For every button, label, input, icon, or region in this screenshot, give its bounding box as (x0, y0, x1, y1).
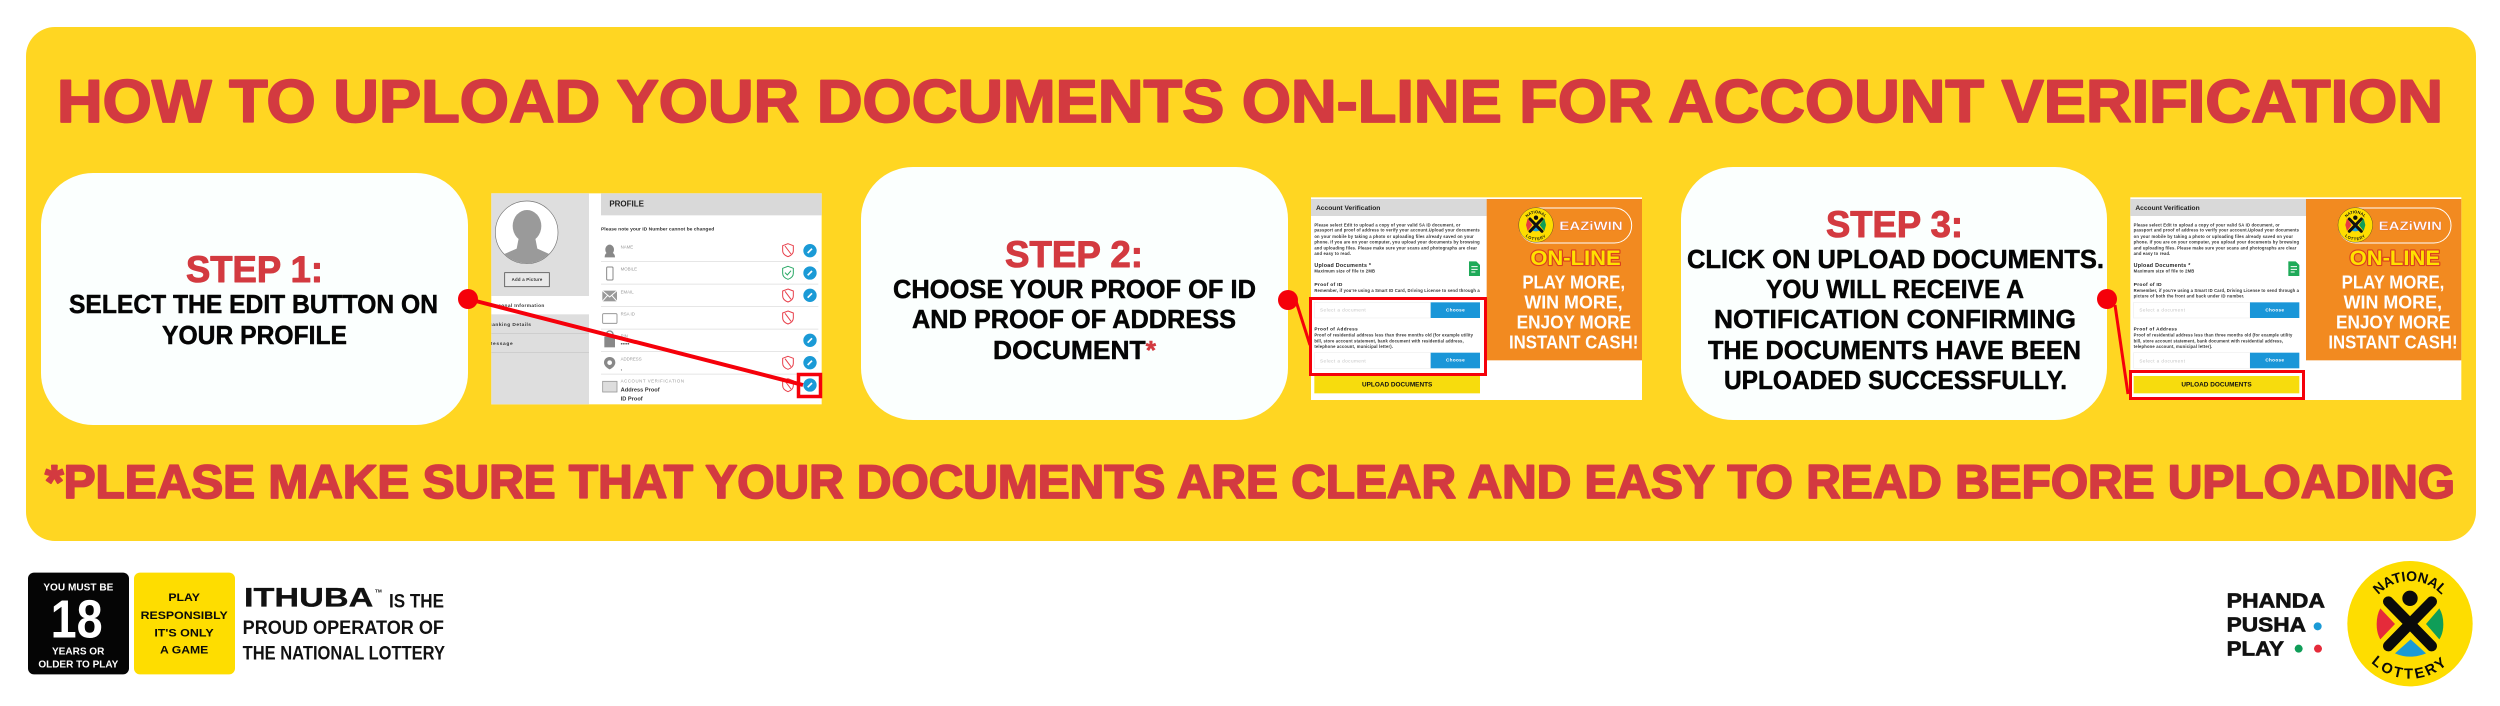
add a picture button (505, 273, 549, 287)
step 2 heading: STEP 2: (1005, 234, 1143, 275)
icon: green document (2288, 261, 2299, 276)
icon: National Lottery logo (2347, 561, 2473, 686)
document pickers: Choose (1446, 307, 1465, 312)
profile rows: RSA ID (621, 312, 635, 317)
document pickers: Choose (2265, 358, 2284, 363)
promo: Eaziwin banner (1486, 199, 1642, 360)
document pickers: telephone account, municipal letter). (2134, 344, 2212, 349)
verification instructions: Maximum size of file to 2MB (2134, 269, 2194, 274)
step 2 instruction: DOCUMENT* (993, 335, 1157, 365)
EaziWin pill: EAZiWIN (2379, 219, 2442, 233)
badge: 18 years or older: OLDER TO PLAY (38, 660, 119, 671)
slogan: Phanda Pusha Play: PUSHA (2227, 614, 2306, 637)
promo copy: WIN MORE, (1524, 291, 1623, 312)
step 3 instruction: NOTIFICATION CONFIRMING (1714, 304, 2076, 334)
verification instructions: passport and proof of address to verify your account.Upload your documents (1314, 228, 1480, 233)
verification instructions: and uploading files. Please make sure your scans and photographs are clear (2134, 245, 2297, 250)
document pickers: Proof of residential address less than three months old (for example utility (1314, 333, 1474, 338)
icon: National Lottery logo: LOTTERY (2345, 234, 2364, 240)
verification instructions: passport and proof of address to verify your account.Upload your documents (2134, 228, 2300, 233)
verification instructions: Proof of ID (2134, 282, 2162, 288)
document pickers: Select a document (2139, 358, 2186, 363)
panel: step 2 verification screenshot (1311, 197, 1642, 400)
profile rows: ••••• (621, 341, 630, 347)
badge: play responsibly: IT'S ONLY (154, 627, 214, 639)
promo copy (1509, 271, 1638, 352)
verification instructions: on your mobile by taking a photo or uploading files already saved on your (2134, 234, 2293, 239)
verification instructions: Proof of ID (1314, 282, 1343, 288)
EaziWin pill (2339, 208, 2451, 243)
upload documents button (1314, 376, 1480, 393)
promo copy: ENJOY MORE (1517, 312, 1631, 333)
icon: National Lottery logo: NATIONAL (1525, 210, 1546, 218)
verification instructions: Maximum size of file to 2MB (1314, 269, 1375, 274)
verification instructions: picture of both the front and back under ID number. (2134, 294, 2244, 299)
document pickers: Choose (1446, 358, 1465, 363)
badge: 18 years or older: YEARS OR (52, 646, 104, 657)
document pickers (2134, 302, 2299, 368)
panel: step 2 verification screenshot: Account Verification (1316, 205, 1380, 212)
verification instructions: Upload Documents * (1314, 263, 1372, 269)
step 2 instruction: AND PROOF OF ADDRESS (912, 304, 1236, 334)
step 1 instruction: YOUR PROFILE (162, 320, 347, 350)
document pickers: bill, store account statement, bank document with residential address, (2134, 338, 2283, 343)
promo copy: INSTANT CASH! (2328, 331, 2458, 352)
document pickers: Proof of Address (1314, 326, 1358, 331)
arrow: step 3 pointer to upload button (2097, 289, 2304, 398)
promo copy: ENJOY MORE (2336, 312, 2450, 333)
profile rows: EMAIL (621, 289, 634, 294)
document pickers: bill, store account statement, bank document with residential address, (1314, 338, 1464, 343)
upload documents button: UPLOAD DOCUMENTS (2181, 383, 2252, 389)
slogan: Phanda Pusha Play (2227, 589, 2325, 661)
profile rows: Address Proof (621, 388, 660, 394)
footer: slogan and logo (2227, 561, 2473, 686)
profile rows: ACCOUNT VERIFICATION (621, 379, 684, 384)
verification instructions: phone. If you are on your computer, you upload your documents by browsing (1314, 240, 1480, 245)
profile rows (601, 244, 818, 402)
panel: step 1 profile screenshot: PROFILE (609, 200, 645, 209)
profile rows: ID Proof (621, 396, 643, 402)
sidebar menu: Banking Details (488, 322, 531, 328)
icon: National Lottery logo: LOTTERY (2372, 655, 2444, 679)
verification instructions (1314, 222, 1480, 293)
verification instructions: Remember, if you're using a Smart ID Card, Driving License to send through a (2134, 288, 2300, 293)
document pickers: Choose (2265, 307, 2284, 312)
document pickers: Proof of residential address less than three months old (for example utility (2134, 333, 2293, 338)
step 3 instruction (1687, 244, 2104, 395)
document pickers (1314, 297, 1480, 368)
row icons (602, 245, 617, 392)
profile rows: , (621, 366, 622, 371)
promo copy: PLAY MORE, (1522, 271, 1625, 292)
profile rows: PIN (621, 334, 628, 339)
badge: play responsibly: RESPONSIBLY (141, 610, 228, 622)
step 3 heading: STEP 3: (1826, 204, 1963, 245)
promo copy: WIN MORE, (2344, 291, 2442, 312)
verification instructions: phone. If you are on your computer, you upload your documents by browsing (2134, 240, 2299, 245)
sidebar menu: Personal Information (489, 303, 544, 309)
edit buttons (803, 244, 817, 392)
title: HOW TO UPLOAD YOUR DOCUMENTS ON-LINE FOR ACCOUNT VERIFICATION (57, 68, 2443, 135)
on-line heading: ON-LINE (2350, 245, 2440, 270)
panel: step 1 text card (41, 173, 468, 425)
document pickers: Select a document (1320, 308, 1366, 313)
profile rows: NAME (621, 244, 633, 249)
footer: responsible play badges and operator (28, 573, 445, 674)
upload documents button: UPLOAD DOCUMENTS (1362, 383, 1432, 389)
step 2 instruction (893, 274, 1256, 365)
step 3 instruction: CLICK ON UPLOAD DOCUMENTS. (1687, 244, 2104, 274)
panel: step 1 profile screenshot (488, 193, 822, 404)
panel: step 3 verification screenshot (2130, 197, 2462, 400)
badge: 18 years or older: YOU MUST BE (43, 583, 114, 594)
panel: yellow background (26, 27, 2476, 541)
icon: National Lottery logo: NATIONAL (2372, 571, 2444, 595)
step 3 instruction: YOU WILL RECEIVE A (1766, 274, 2024, 304)
verification instructions: and uploading files. Please make sure your scans and photographs are clear (1314, 245, 1477, 250)
sidebar menu (488, 296, 589, 353)
badge: play responsibly (134, 573, 235, 674)
footnote: *PLEASE MAKE SURE THAT YOUR DOCUMENTS ARE CLEAR AND EASY TO READ BEFORE UPLOADING (45, 455, 2455, 508)
panel: step 3 verification screenshot: Account Verification (2135, 205, 2200, 212)
badge: play responsibly: PLAY (168, 592, 201, 604)
EaziWin pill (1519, 208, 1632, 243)
promo copy (2328, 271, 2458, 352)
operator statement (243, 583, 445, 664)
promo copy: PLAY MORE, (2342, 271, 2444, 292)
badge: play responsibly: A GAME (160, 644, 208, 656)
document pickers: Select a document (1320, 358, 1366, 363)
icon: National Lottery logo: NATIONAL (2344, 210, 2366, 218)
icon: National Lottery logo: LOTTERY (1526, 234, 1546, 240)
step 3 instruction: THE DOCUMENTS HAVE BEEN (1708, 335, 2081, 365)
add a picture button: Add a Picture (512, 277, 543, 282)
operator statement: IS THE (389, 591, 444, 612)
icon: avatar (495, 201, 558, 267)
step 1 heading: STEP 1: (186, 249, 323, 290)
slogan: Phanda Pusha Play: PHANDA (2227, 589, 2325, 612)
verification instructions: on your mobile by taking a photo or uploading files already saved on your (1314, 234, 1474, 239)
EaziWin pill: EAZiWIN (1559, 219, 1623, 233)
document pickers: Select a document (2139, 308, 2186, 313)
badge: 18 years or older: 18 (51, 590, 103, 649)
profile rows: MOBILE (621, 267, 637, 272)
on-line heading: ON-LINE (1530, 245, 1621, 270)
document pickers: telephone account, municipal letter). (1314, 344, 1393, 349)
icon: National Lottery logo (1518, 207, 1554, 243)
panel: step 2 text card (861, 167, 1288, 420)
verification instructions: and easy to read. (2134, 251, 2170, 256)
panel: step 3 text card (1681, 167, 2107, 420)
arrow: step 2 pointer to document pickers (1278, 290, 1486, 374)
promo copy: INSTANT CASH! (1509, 331, 1638, 352)
verification instructions: Upload Documents * (2134, 263, 2191, 269)
verification instructions: and easy to read. (1314, 251, 1351, 256)
verification instructions: Please select Edit to upload a copy of your valid SA ID document, or (2134, 222, 2280, 227)
verification instructions: Remember, if you're using a Smart ID Card, Driving License to send through a (1314, 288, 1480, 293)
upload documents button (2134, 376, 2299, 393)
operator statement: THE NATIONAL LOTTERY (243, 643, 445, 664)
slogan: Phanda Pusha Play: PLAY (2227, 638, 2284, 661)
verification instructions (2134, 222, 2300, 299)
icon: green document (1469, 261, 1480, 276)
operator statement: TM (375, 588, 382, 593)
operator statement: ITHUBA (244, 583, 373, 613)
arrow: step 1 pointer to edit button (458, 289, 820, 396)
step 1 instruction: SELECT THE EDIT BUTTON ON (69, 289, 438, 319)
badge: 18 years or older (28, 573, 129, 674)
icon: National Lottery logo (2338, 207, 2373, 243)
operator statement: PROUD OPERATOR OF (243, 618, 444, 639)
step 3 instruction: UPLOADED SUCCESSFULLY. (1724, 365, 2067, 395)
step 2 instruction: CHOOSE YOUR PROOF OF ID (893, 274, 1256, 304)
profile rows: ADDRESS (621, 356, 642, 361)
step 1 instruction (69, 289, 438, 350)
sidebar menu: Message (488, 341, 513, 347)
verification instructions: Please select Edit to upload a copy of your valid SA ID document, or (1314, 222, 1461, 227)
verification shields (783, 244, 793, 392)
promo: Eaziwin banner (2306, 199, 2462, 360)
document pickers: Proof of Address (2134, 326, 2177, 331)
panel: step 1 profile screenshot: Please note your ID Number cannot be changed (601, 227, 714, 233)
